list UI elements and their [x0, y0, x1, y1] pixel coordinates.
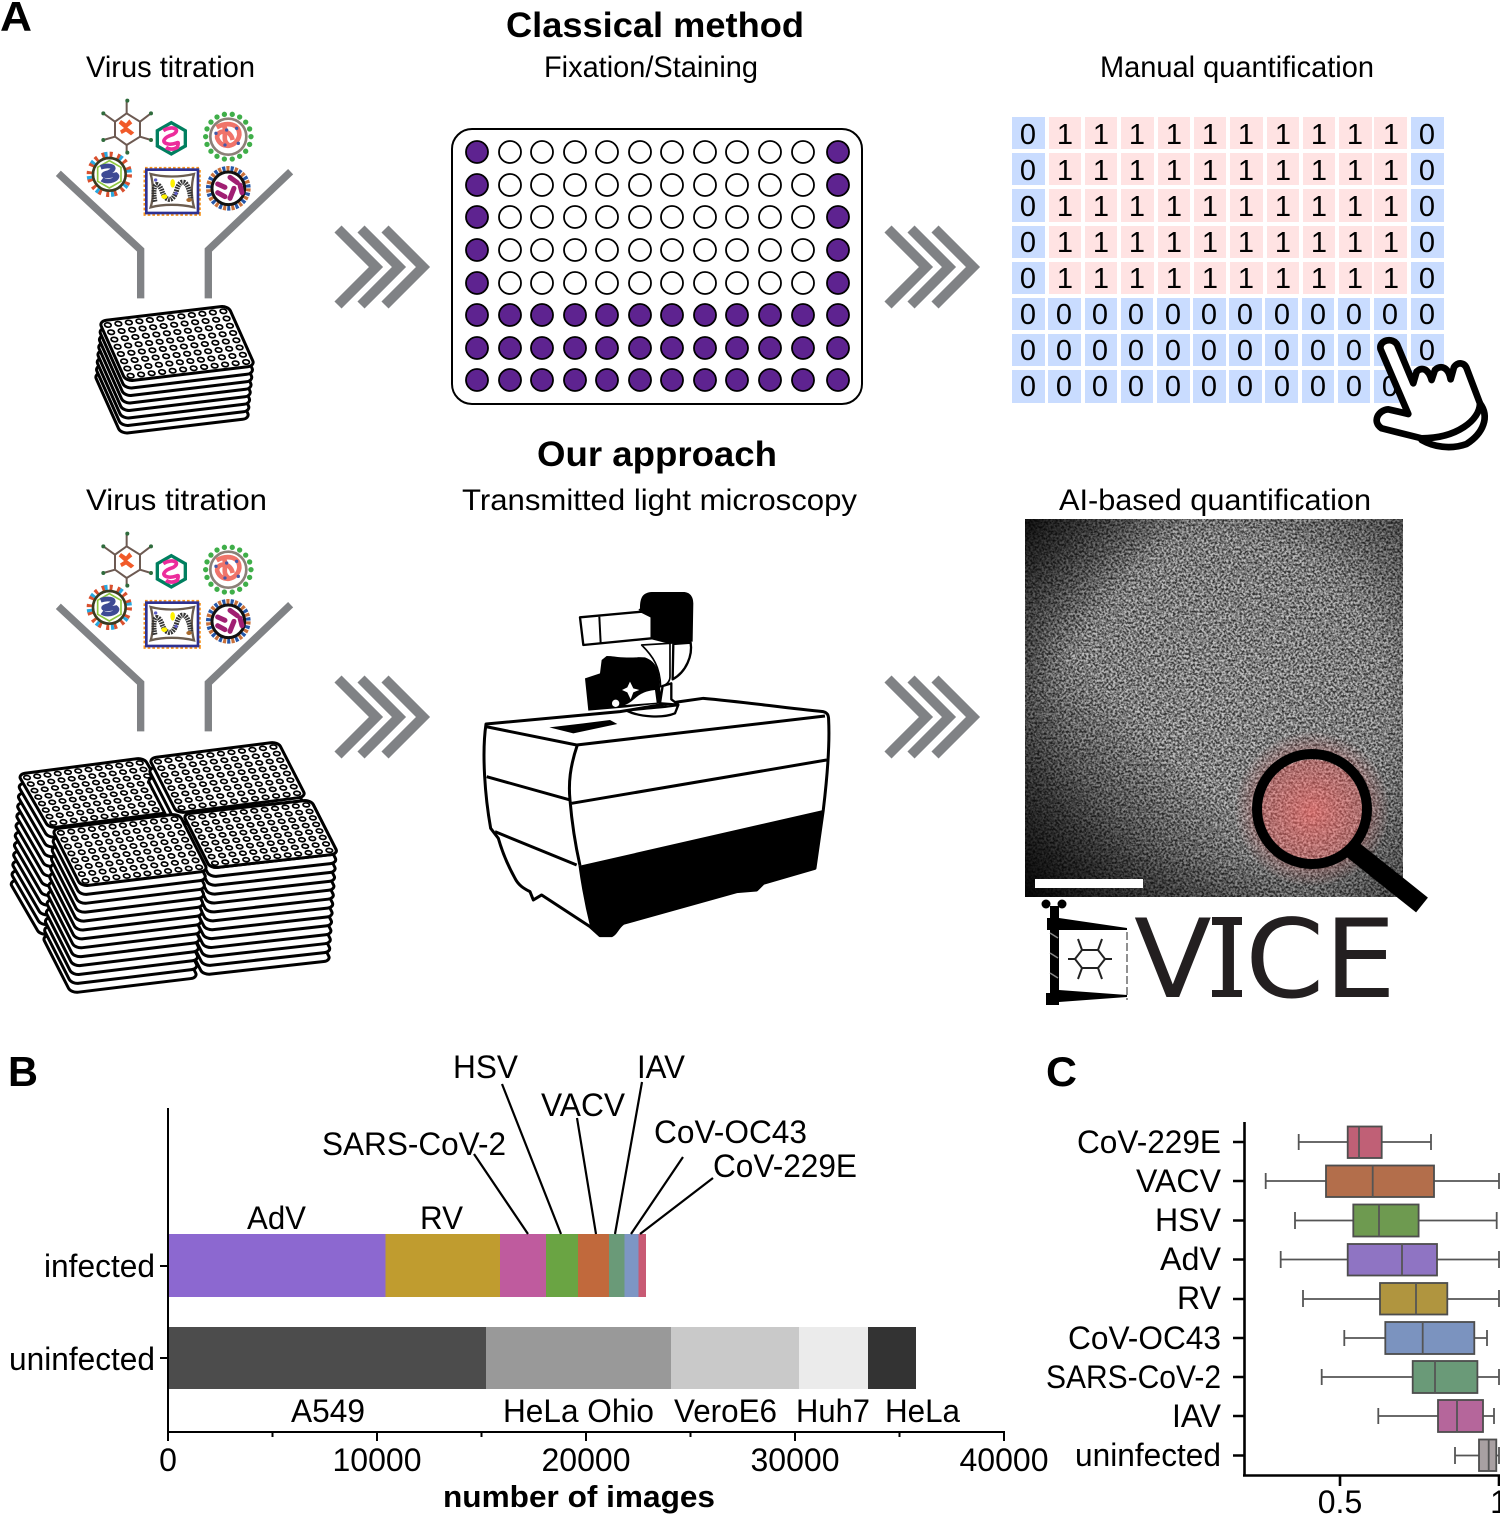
arrow: chevrons to staining [338, 229, 423, 305]
manual quantification matrix of 0 and 1: 1 [1275, 191, 1291, 223]
manual quantification matrix of 0 and 1: 1 [1202, 227, 1218, 259]
box: CoV-OC43 [1344, 1322, 1487, 1354]
heading: Classical method: Classical method [506, 6, 804, 45]
bar labels: infected [44, 1248, 155, 1284]
manual quantification matrix of 0 and 1: 1 [1383, 227, 1399, 259]
manual quantification matrix of 0 and 1: 0 [1092, 299, 1108, 331]
manual quantification matrix of 0 and 1: 0 [1128, 371, 1144, 403]
manual quantification matrix of 0 and 1: 0 [1346, 335, 1362, 367]
manual quantification matrix of 0 and 1: 1 [1275, 227, 1291, 259]
manual quantification matrix of 0 and 1: 1 [1093, 263, 1109, 295]
x axis title: number of images [443, 1479, 715, 1514]
manual quantification matrix of 0 and 1: 1 [1202, 119, 1218, 151]
manual quantification matrix of 0 and 1: 1 [1383, 155, 1399, 187]
box plot: per-virus scores: AdV [1160, 1241, 1222, 1277]
icon: viruses entering plates through funnel (approach) [58, 532, 291, 731]
heading: Fixation/Staining: Fixation/Staining [544, 51, 758, 84]
icon: four stacks of plates [9, 742, 338, 993]
manual quantification matrix of 0 and 1: 0 [1020, 335, 1036, 367]
manual quantification matrix of 0 and 1: 0 [1020, 155, 1036, 187]
bar labels: CoV-OC43 [654, 1114, 807, 1150]
manual quantification matrix of 0 and 1: 1 [1202, 155, 1218, 187]
manual quantification matrix of 0 and 1: 0 [1237, 371, 1253, 403]
manual quantification matrix of 0 and 1: 0 [1237, 299, 1253, 331]
manual quantification matrix of 0 and 1: 0 [1419, 335, 1435, 367]
manual quantification matrix of 0 and 1 [1012, 117, 1444, 403]
manual quantification matrix of 0 and 1: 0 [1020, 191, 1036, 223]
bar labels: IAV [637, 1049, 686, 1085]
heading: Manual quantification: Manual quantification [1100, 51, 1374, 84]
manual quantification matrix of 0 and 1: 0 [1274, 335, 1290, 367]
manual quantification matrix of 0 and 1: 0 [1201, 299, 1217, 331]
manual quantification matrix of 0 and 1: 0 [1020, 299, 1036, 331]
manual quantification matrix of 0 and 1: 0 [1419, 155, 1435, 187]
bar labels: VeroE6 [674, 1393, 777, 1429]
panel label B: B [8, 1048, 38, 1095]
bar labels: SARS-CoV-2 [322, 1126, 506, 1162]
uninfected stacked bar [168, 1327, 916, 1389]
heading: Transmitted light microscopy: Transmitted light microscopy [462, 484, 857, 517]
manual quantification matrix of 0 and 1: 0 [1419, 263, 1435, 295]
manual quantification matrix of 0 and 1: 0 [1165, 371, 1181, 403]
manual quantification matrix of 0 and 1: 1 [1275, 119, 1291, 151]
manual quantification matrix of 0 and 1: 1 [1093, 191, 1109, 223]
box plot: per-virus scores: VACV [1136, 1163, 1222, 1199]
manual quantification matrix of 0 and 1: 0 [1201, 371, 1217, 403]
manual quantification matrix of 0 and 1: 1 [1275, 263, 1291, 295]
manual quantification matrix of 0 and 1: 1 [1129, 119, 1145, 151]
manual quantification matrix of 0 and 1: 1 [1311, 191, 1327, 223]
bar labels: Huh7 [796, 1393, 870, 1429]
box: RV [1303, 1283, 1499, 1314]
manual quantification matrix of 0 and 1: 0 [1310, 335, 1326, 367]
manual quantification matrix of 0 and 1: 0 [1020, 371, 1036, 403]
manual quantification matrix of 0 and 1: 1 [1311, 119, 1327, 151]
manual quantification matrix of 0 and 1: 1 [1057, 263, 1073, 295]
manual quantification matrix of 0 and 1: 0 [1419, 191, 1435, 223]
manual quantification matrix of 0 and 1: 0 [1092, 371, 1108, 403]
box: HSV [1295, 1204, 1497, 1236]
manual quantification matrix of 0 and 1: 0 [1020, 263, 1036, 295]
manual quantification matrix of 0 and 1: 0 [1346, 371, 1362, 403]
manual quantification matrix of 0 and 1: 1 [1275, 155, 1291, 187]
manual quantification matrix of 0 and 1: 0 [1020, 119, 1036, 151]
manual quantification matrix of 0 and 1: 1 [1238, 191, 1254, 223]
manual quantification matrix of 0 and 1: 1 [1383, 191, 1399, 223]
heading: AI-based quantification: AI-based quantification [1059, 484, 1371, 517]
logo: DeepVICE hemocytometer and VICE wordmark: VICE [1134, 896, 1396, 1023]
manual quantification matrix of 0 and 1: 1 [1166, 119, 1182, 151]
icon: viruses entering plates through funnel (classical) [58, 99, 291, 298]
box plot: per-virus scores: RV [1177, 1280, 1222, 1316]
manual quantification matrix of 0 and 1: 0 [1092, 335, 1108, 367]
manual quantification matrix of 0 and 1: 1 [1202, 191, 1218, 223]
box plot: per-virus scores: IAV [1172, 1398, 1222, 1434]
heading: Virus titration: Virus titration [86, 51, 255, 84]
manual quantification matrix of 0 and 1: 1 [1347, 191, 1363, 223]
box: IAV [1378, 1400, 1494, 1432]
manual quantification matrix of 0 and 1: 1 [1093, 119, 1109, 151]
manual quantification matrix of 0 and 1: 0 [1346, 299, 1362, 331]
box plot: per-virus scores: HSV [1155, 1202, 1222, 1238]
manual quantification matrix of 0 and 1: 1 [1129, 227, 1145, 259]
manual quantification matrix of 0 and 1: 0 [1128, 335, 1144, 367]
manual quantification matrix of 0 and 1: 1 [1057, 227, 1073, 259]
manual quantification matrix of 0 and 1: 1 [1093, 227, 1109, 259]
manual quantification matrix of 0 and 1: 1 [1383, 263, 1399, 295]
manual quantification matrix of 0 and 1: 1 [1093, 155, 1109, 187]
manual quantification matrix of 0 and 1: 1 [1166, 191, 1182, 223]
manual quantification matrix of 0 and 1: 0 [1419, 227, 1435, 259]
box plot: per-virus scores: CoV-OC43 [1068, 1320, 1221, 1356]
box plot: per-virus scores: SARS-CoV-2 [1046, 1359, 1221, 1395]
panel label C: C [1046, 1048, 1077, 1095]
manual quantification matrix of 0 and 1: 0 [1165, 299, 1181, 331]
manual quantification matrix of 0 and 1: 1 [1311, 227, 1327, 259]
bar labels: HeLa Ohio [503, 1393, 654, 1429]
x axis tick labels: 0 [159, 1442, 177, 1478]
manual quantification matrix of 0 and 1: 0 [1201, 335, 1217, 367]
manual quantification matrix of 0 and 1: 0 [1274, 371, 1290, 403]
manual quantification matrix of 0 and 1: 0 [1020, 227, 1036, 259]
manual quantification matrix of 0 and 1: 1 [1166, 227, 1182, 259]
manual quantification matrix of 0 and 1: 0 [1056, 371, 1072, 403]
bar labels: VACV [541, 1087, 626, 1123]
leader lines [474, 1082, 713, 1234]
manual quantification matrix of 0 and 1: 1 [1347, 263, 1363, 295]
box: CoV-229E [1299, 1126, 1431, 1158]
arrow: chevrons to microscope [338, 679, 423, 755]
manual quantification matrix of 0 and 1: 1 [1238, 227, 1254, 259]
manual quantification matrix of 0 and 1: 1 [1057, 119, 1073, 151]
manual quantification matrix of 0 and 1: 1 [1238, 263, 1254, 295]
manual quantification matrix of 0 and 1: 0 [1056, 299, 1072, 331]
icon: stack of plates (classical) [94, 306, 255, 434]
box: VACV [1266, 1166, 1499, 1197]
box: AdV [1281, 1244, 1499, 1276]
box plot: per-virus scores [1046, 1122, 1500, 1514]
magnifier showing infected cells in red [1234, 731, 1422, 905]
manual quantification matrix of 0 and 1: 1 [1129, 155, 1145, 187]
x axis tick labels [1318, 1484, 1500, 1514]
arrow: chevrons to manual quantification [888, 229, 973, 305]
x axis tick labels: 20000 [542, 1442, 630, 1478]
manual quantification matrix of 0 and 1: 1 [1238, 155, 1254, 187]
box plot: per-virus scores: uninfected [1075, 1437, 1221, 1473]
manual quantification matrix of 0 and 1: 0 [1382, 335, 1398, 367]
bar chart: number of images [9, 1049, 1048, 1514]
manual quantification matrix of 0 and 1: 1 [1238, 119, 1254, 151]
manual quantification matrix of 0 and 1: 0 [1165, 335, 1181, 367]
manual quantification matrix of 0 and 1: 0 [1237, 335, 1253, 367]
bar labels: AdV [247, 1200, 307, 1236]
arrow: chevrons to AI-based quantification [888, 679, 973, 755]
bar labels [9, 1049, 960, 1429]
manual quantification matrix of 0 and 1: 0 [1419, 371, 1435, 403]
manual quantification matrix of 0 and 1: 0 [1382, 371, 1398, 403]
manual quantification matrix of 0 and 1: 1 [1347, 119, 1363, 151]
microscopy image with AI-based quantification [1025, 519, 1422, 905]
manual quantification matrix of 0 and 1: 1 [1347, 155, 1363, 187]
manual quantification matrix of 0 and 1: 1 [1166, 263, 1182, 295]
x axis tick labels: 10000 [333, 1442, 421, 1478]
manual quantification matrix of 0 and 1: 1 [1057, 191, 1073, 223]
manual quantification matrix of 0 and 1: 1 [1311, 263, 1327, 295]
manual quantification matrix of 0 and 1: 1 [1383, 119, 1399, 151]
manual quantification matrix of 0 and 1: 1 [1311, 155, 1327, 187]
x axis tick labels: 30000 [751, 1442, 839, 1478]
box plot: per-virus scores: CoV-229E [1077, 1124, 1221, 1160]
manual quantification matrix of 0 and 1: 0 [1274, 299, 1290, 331]
manual quantification matrix of 0 and 1: 1 [1129, 191, 1145, 223]
bar labels: HSV [453, 1049, 519, 1085]
bar labels: HeLa [885, 1393, 960, 1429]
manual quantification matrix of 0 and 1: 1 [1057, 155, 1073, 187]
manual quantification matrix of 0 and 1: 1 [1202, 263, 1218, 295]
bar labels: CoV-229E [713, 1148, 857, 1184]
infected stacked bar [168, 1234, 646, 1297]
heading: Our approach: Our approach [537, 435, 777, 474]
manual quantification matrix of 0 and 1: 0 [1056, 335, 1072, 367]
box: SARS-CoV-2 [1322, 1361, 1499, 1393]
manual quantification matrix of 0 and 1: 0 [1419, 119, 1435, 151]
bar labels: RV [420, 1200, 464, 1236]
manual quantification matrix of 0 and 1: 0 [1310, 299, 1326, 331]
96-well plate after staining [452, 129, 862, 404]
x axis tick labels: 40000 [960, 1442, 1048, 1478]
manual quantification matrix of 0 and 1: 0 [1419, 299, 1435, 331]
manual quantification matrix of 0 and 1: 1 [1166, 155, 1182, 187]
manual quantification matrix of 0 and 1: 1 [1347, 227, 1363, 259]
bar labels: A549 [291, 1393, 365, 1429]
box: uninfected [1455, 1440, 1499, 1471]
manual quantification matrix of 0 and 1: 1 [1129, 263, 1145, 295]
bar labels: uninfected [9, 1341, 155, 1377]
x axis tick labels [159, 1442, 1048, 1478]
manual quantification matrix of 0 and 1: 0 [1128, 299, 1144, 331]
manual quantification matrix of 0 and 1: 0 [1382, 299, 1398, 331]
icon: pointing hand [1377, 340, 1485, 447]
scale bar [1035, 879, 1143, 888]
icon: transmitted light microscope [484, 592, 829, 936]
manual quantification matrix of 0 and 1: 0 [1310, 371, 1326, 403]
heading: Virus titration (approach): Virus titration [86, 484, 267, 517]
